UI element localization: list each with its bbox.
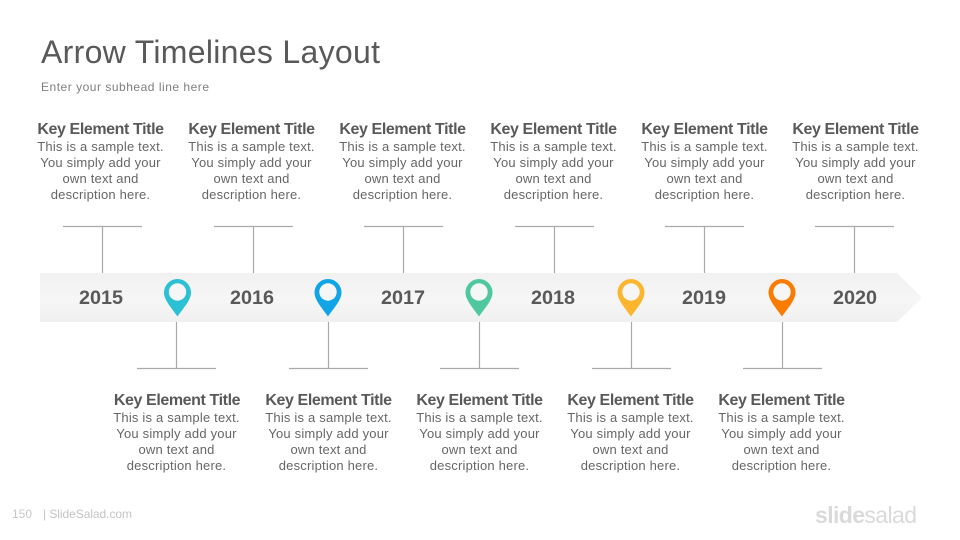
top block 2020: This is a sample text. (792, 139, 919, 154)
top block 2019: You simply add your (644, 155, 765, 170)
icon: blue map pin (314, 279, 342, 316)
year 2016: 2016 (230, 287, 274, 309)
top block 2020: description here. (806, 187, 905, 202)
top block 2018: This is a sample text. (490, 139, 617, 154)
bottom block 2: You simply add your (268, 426, 389, 441)
top block 2018: own text and (515, 171, 592, 186)
year 2020: 2020 (833, 287, 877, 309)
year 2015: 2015 (79, 287, 123, 309)
bottom block 1 (113, 392, 241, 473)
connector 2017 (364, 226, 443, 273)
top block 2018 (490, 121, 617, 202)
top block 2015: This is a sample text. (37, 139, 164, 154)
connector 2016 (214, 226, 293, 273)
top block 2019: This is a sample text. (641, 139, 768, 154)
top block 2018: Key Element Title (490, 121, 617, 138)
top block 2017: own text and (364, 171, 441, 186)
connector 2015 (63, 226, 142, 273)
logo wordmark: slidesalad (815, 502, 917, 528)
top block 2016: Key Element Title (188, 121, 315, 138)
connector bottom 1 (137, 322, 216, 368)
bottom block 1: This is a sample text. (113, 410, 240, 425)
top block 2015 (37, 121, 164, 202)
bottom block 2: This is a sample text. (265, 410, 392, 425)
top block 2020: You simply add your (795, 155, 916, 170)
top block 2019: description here. (655, 187, 754, 202)
arrow timeline bar (40, 273, 922, 322)
bottom block 4: description here. (581, 458, 680, 473)
top block 2017: description here. (353, 187, 452, 202)
top block 2019: Key Element Title (641, 121, 768, 138)
connector bottom 4 (592, 322, 671, 368)
top block 2017: You simply add your (342, 155, 463, 170)
connector 2020 (815, 226, 894, 273)
bottom block 4: Key Element Title (567, 392, 694, 409)
bottom block 2 (265, 392, 392, 473)
connector bottom 5 (743, 322, 822, 368)
bottom block 1: own text and (138, 442, 215, 457)
bottom block 3: This is a sample text. (416, 410, 543, 425)
icon: yellow map pin (618, 279, 644, 316)
top block 2017 (339, 121, 466, 202)
top block 2020 (792, 121, 919, 202)
bottom block 5: Key Element Title (718, 392, 845, 409)
bottom block 3: Key Element Title (416, 392, 543, 409)
footer page number: 150 (12, 507, 32, 521)
connector 2019 (665, 226, 744, 273)
top block 2015: You simply add your (40, 155, 161, 170)
bottom block 5: description here. (732, 458, 831, 473)
year 2017: 2017 (381, 287, 425, 309)
top block 2016: You simply add your (191, 155, 312, 170)
connector bottom 3 (440, 322, 519, 368)
top block 2018: description here. (504, 187, 603, 202)
top block 2017: Key Element Title (339, 121, 466, 138)
top block 2017: This is a sample text. (339, 139, 466, 154)
icon: green map pin (466, 279, 492, 316)
bottom block 1: description here. (127, 458, 226, 473)
top block 2019: own text and (666, 171, 743, 186)
bottom block 3: You simply add your (419, 426, 540, 441)
bottom block 4: own text and (592, 442, 669, 457)
top block 2016: description here. (202, 187, 301, 202)
bottom block 2: description here. (279, 458, 378, 473)
bottom block 5 (718, 392, 845, 473)
top block 2020: Key Element Title (792, 121, 919, 138)
year 2019: 2019 (682, 287, 726, 309)
top block 2015: description here. (51, 187, 150, 202)
bottom block 3: own text and (441, 442, 518, 457)
bottom block 5: This is a sample text. (718, 410, 845, 425)
top block 2016 (188, 121, 315, 202)
subhead: Enter your subhead line here (41, 80, 209, 94)
top block 2016: own text and (213, 171, 290, 186)
title: Arrow Timelines Layout (41, 34, 380, 70)
bottom block 4: You simply add your (570, 426, 691, 441)
icon: teal map pin (164, 279, 191, 316)
icon: orange map pin (768, 279, 796, 316)
bottom block 3 (416, 392, 543, 473)
bottom block 2: own text and (290, 442, 367, 457)
year 2018: 2018 (531, 287, 575, 309)
top block 2015: Key Element Title (37, 121, 164, 138)
top block 2019 (641, 121, 768, 202)
top block 2020: own text and (817, 171, 894, 186)
bottom block 5: own text and (743, 442, 820, 457)
connector bottom 2 (289, 322, 368, 368)
bottom block 2: Key Element Title (265, 392, 392, 409)
top block 2018: You simply add your (493, 155, 614, 170)
bottom block 4 (567, 392, 694, 473)
bottom block 5: You simply add your (721, 426, 842, 441)
bottom block 4: This is a sample text. (567, 410, 694, 425)
connector 2018 (515, 226, 594, 273)
top block 2016: This is a sample text. (188, 139, 315, 154)
footer source: | SlideSalad.com (43, 507, 132, 521)
bottom block 3: description here. (430, 458, 529, 473)
bottom block 1: Key Element Title (114, 392, 241, 409)
bottom block 1: You simply add your (116, 426, 237, 441)
top block 2015: own text and (62, 171, 139, 186)
